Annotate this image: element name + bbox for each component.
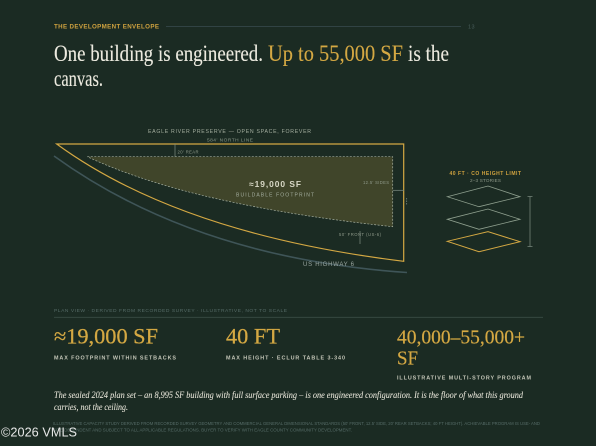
height bar [528, 196, 532, 246]
rear setback [175, 144, 198, 156]
stat: height [226, 324, 345, 362]
north boundary labels [148, 129, 311, 144]
front setback [339, 231, 382, 244]
stacked floors [447, 186, 520, 252]
section header: 13 [468, 24, 474, 30]
plan caption: PLAN VIEW · DERIVED FROM RECORDED SURVEY · ILLUSTRATIVE, NOT TO SCALE [54, 308, 288, 314]
height heading: 40 FT · CO HEIGHT LIMIT [450, 171, 521, 177]
footnote [53, 421, 540, 432]
side setback [363, 180, 407, 205]
parcel boundary [57, 144, 404, 261]
buildable footprint [87, 157, 393, 227]
stat: program [397, 326, 532, 382]
height heading [450, 171, 521, 183]
north boundary labels: EAGLE RIVER PRESERVE — OPEN SPACE, FOREVER [148, 129, 311, 135]
stat: height: MAX HEIGHT · ECLUR TABLE 3-340 [226, 356, 345, 362]
north boundary labels: 584' NORTH LINE [207, 138, 253, 144]
stat: program: SF [397, 348, 418, 370]
side setback: 12.5' SIDES [363, 180, 389, 185]
title [54, 41, 449, 92]
highway label: US HIGHWAY 6 [303, 262, 355, 268]
section header: THE DEVELOPMENT ENVELOPE [54, 23, 159, 30]
footnote: ILLUSTRATIVE CAPACITY STUDY DERIVED FROM RECORDED SURVEY GEOMETRY AND COMMERCIAL GENERAL DIMENSIONAL STANDARDS (50' FRONT, 12.5' SIDE, 20' REAR SETBACKS; 40 FT HEIGHT). ACHIEVABLE PROGRAM IS USE- AND [53, 421, 540, 426]
stat: height: 40 FT [226, 324, 281, 348]
italic statement: carries, not the ceiling. [54, 402, 128, 413]
stat: program: ILLUSTRATIVE MULTI-STORY PROGRAM [397, 376, 532, 382]
stat: program: 40,000–55,000+ [397, 326, 525, 348]
title: canvas. [54, 66, 103, 92]
footprint label: BUILDABLE FOOTPRINT [236, 193, 314, 199]
footnote: SITE-DEPENDENT AND SUBJECT TO ALL APPLICABLE REGULATIONS. BUYER TO VERIFY WITH EAGLE COUNTY COMMUNITY DEVELOPMENT. [53, 428, 352, 432]
copyright watermark: ©2026 VMLS [1, 426, 77, 440]
footprint label: ≈19,000 SF [249, 179, 301, 189]
title: One building is engineered. [54, 41, 263, 67]
title: Up to 55,000 SF [268, 41, 403, 67]
rear setback: 20' REAR [178, 150, 198, 155]
height limit diagram [447, 171, 532, 252]
site plan diagram [54, 129, 407, 272]
footprint label [236, 179, 314, 199]
stat: footprint [54, 324, 176, 362]
front setback: 50' FRONT (US-6) [339, 232, 382, 237]
height heading: 2–3 STORIES [470, 178, 501, 183]
stat: footprint: MAX FOOTPRINT WITHIN SETBACKS [54, 356, 176, 362]
italic statement [54, 390, 523, 413]
italic statement: The sealed 2024 plan set – an 8,995 SF building with full surface parking – is one engineered configuration. It is the floor of what this ground [54, 390, 523, 401]
title: is the [408, 41, 449, 67]
highway curve [54, 156, 407, 272]
section header [54, 23, 474, 30]
stat: footprint: ≈19,000 SF [54, 324, 158, 348]
